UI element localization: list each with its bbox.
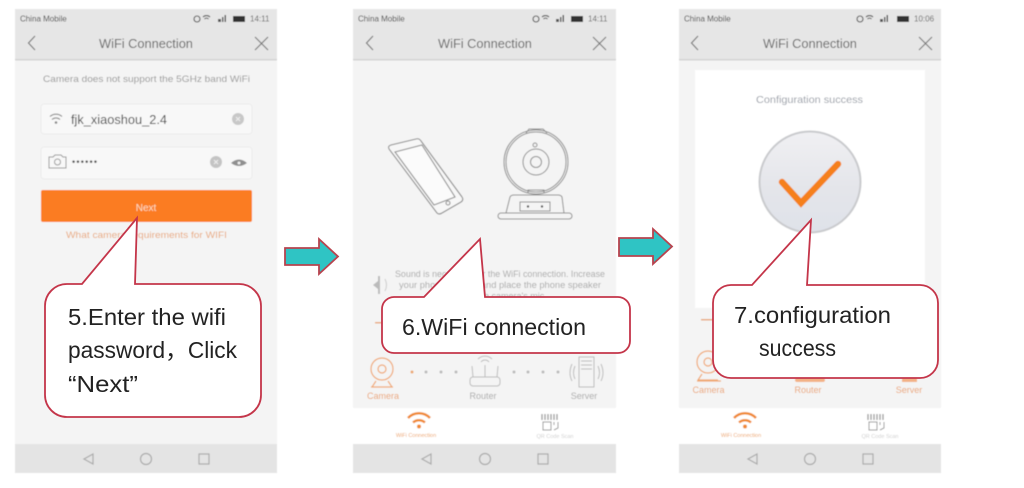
navigation bar [15, 444, 277, 473]
wifi requirements link: What camera requirements for WIFI [66, 230, 227, 240]
step: server: Server [896, 385, 922, 395]
wifi name field: fjk_xiaoshou_2.4 [71, 112, 167, 127]
callout: step 5: “Next” [68, 371, 138, 397]
callout: step 7: 7.configuration [734, 302, 891, 328]
status and title bar: China Mobile [20, 14, 67, 24]
progress dots right [512, 370, 560, 374]
password field: •••••• [72, 156, 97, 166]
callout: step 7: success [759, 335, 836, 361]
status and title bar [679, 9, 941, 60]
step: camera: Camera [367, 391, 399, 401]
tab bar: QR Code Scan [536, 434, 574, 440]
next button [41, 190, 252, 222]
arrow: step 5 to step 6 [285, 239, 338, 274]
next button: Next [136, 203, 157, 214]
password field [41, 147, 252, 179]
step: camera: Camera [692, 385, 725, 395]
step: router: Router [794, 385, 822, 395]
panel: phone screen step 6 [353, 9, 616, 473]
progress dash [701, 319, 715, 320]
step: server: Server [571, 391, 597, 401]
status and title bar: WiFi Connection [438, 36, 532, 51]
status and title bar [15, 9, 277, 60]
tab bar: WiFi Connection [396, 433, 436, 439]
instruction text [395, 269, 605, 301]
step: router [469, 356, 500, 401]
step: router: Router [469, 391, 497, 401]
tab bar [353, 408, 616, 444]
wifi name field [41, 104, 252, 134]
panel: phone screen step 7 [679, 9, 941, 473]
status and title bar: WiFi Connection [99, 36, 193, 51]
status and title bar: China Mobile [684, 14, 731, 24]
callout: step 5: password，Click [68, 337, 237, 363]
callout: step 6 [382, 239, 630, 353]
notice text: Camera does not support the 5GHz band WiFi [43, 74, 250, 84]
status and title bar: China Mobile [358, 14, 405, 24]
instruction text: Sound is necessary for the WiFi connection. Increase [395, 269, 605, 279]
step: camera [367, 358, 399, 401]
instruction text: your phone volume and place the phone speaker [399, 280, 601, 290]
status and title bar: 14:11 [588, 14, 608, 24]
callout: step 5 [45, 218, 261, 417]
step: server [570, 357, 603, 401]
status and title bar: WiFi Connection [763, 36, 857, 51]
icon: camera outline [498, 129, 572, 219]
status and title bar [353, 9, 616, 60]
instruction text: near the camera's mic [456, 291, 545, 301]
icon: smartphone outline [389, 139, 463, 214]
success card [695, 70, 925, 308]
navigation bar [679, 444, 941, 473]
status and title bar: 10:06 [914, 14, 935, 24]
step: router [794, 378, 825, 395]
callout: step 7 [713, 220, 938, 378]
success card: Configuration success [756, 94, 863, 106]
progress dash [375, 322, 385, 324]
navigation bar [353, 444, 616, 473]
icon: success check mark [760, 132, 860, 232]
callout: step 6: 6.WiFi connection [402, 314, 586, 340]
callout: step 5: 5.Enter the wifi [68, 304, 226, 330]
tab bar: QR Code Scan [862, 434, 898, 440]
tab bar: WiFi Connection [721, 433, 761, 439]
icon: speaker [373, 276, 386, 294]
step: camera [692, 351, 725, 395]
progress dots left [410, 370, 458, 374]
tab bar [679, 408, 941, 444]
step: server [896, 378, 922, 395]
status and title bar: 14:11 [250, 14, 270, 24]
arrow: step 6 to step 7 [619, 229, 672, 264]
panel: phone screen step 5 [15, 9, 277, 473]
